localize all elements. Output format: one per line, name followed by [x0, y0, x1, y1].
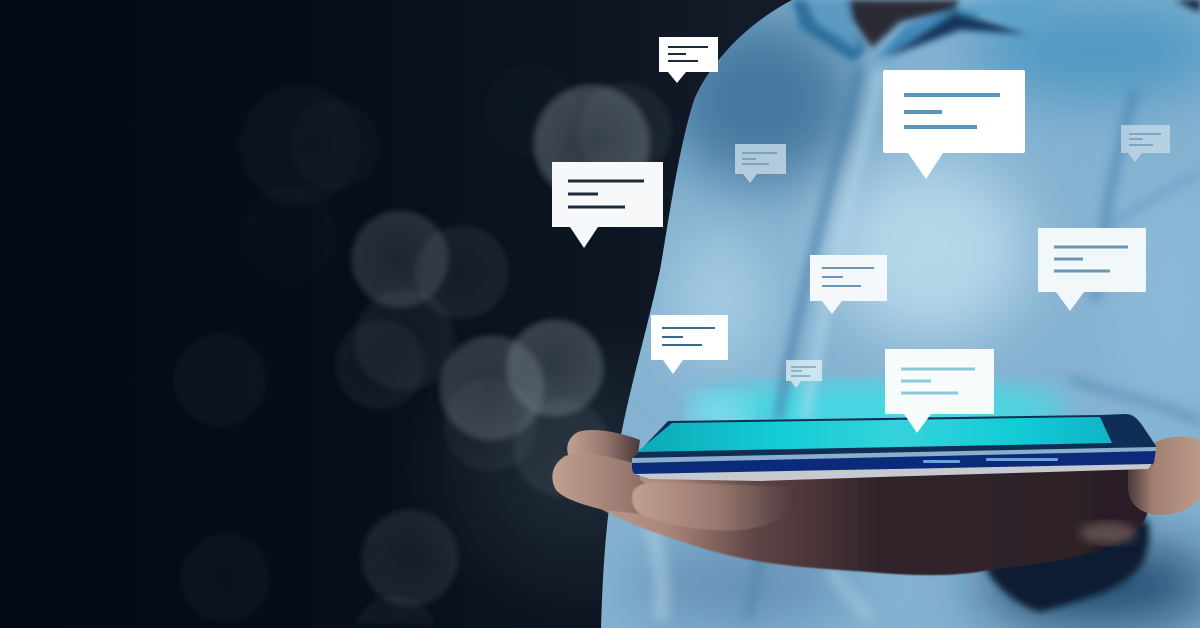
- tablet glass back plate: [633, 414, 1156, 462]
- bokeh lights: [172, 62, 673, 624]
- bubble: top small: [659, 37, 718, 83]
- bubble: above tablet: [885, 349, 994, 433]
- shirt base colour: [600, 0, 1200, 628]
- bubble: tiny center: [786, 360, 822, 388]
- shirt placket and folds: [650, 65, 1200, 620]
- tablet silver bottom line: [634, 464, 1152, 481]
- tablet screen: [637, 417, 1112, 452]
- bubble: center: [810, 255, 887, 314]
- neck and collar: [792, 0, 1200, 62]
- middle finger: [552, 454, 700, 520]
- bubble: lower left: [651, 315, 728, 374]
- hand: [552, 430, 1200, 612]
- bubble: large top right: [883, 70, 1025, 179]
- right thumb: [1128, 437, 1200, 515]
- bubble: left large: [552, 162, 663, 248]
- shirt light and shade: [630, 0, 1200, 625]
- palm: [603, 465, 1148, 575]
- tablet edge band: [632, 449, 1156, 476]
- bubble: faint top center: [735, 144, 786, 183]
- top finger: [567, 430, 640, 470]
- tablet metal line: [632, 447, 1156, 463]
- sleeve cuff: [986, 520, 1149, 612]
- bubble: right middle: [1038, 228, 1146, 311]
- lower finger: [632, 482, 798, 530]
- bubble: faint far right: [1121, 125, 1170, 162]
- side buttons: [923, 460, 960, 463]
- message bubbles: [552, 37, 1170, 433]
- cyan screen glow: [686, 376, 1076, 420]
- man in blue shirt: [600, 0, 1200, 628]
- light on wrist: [1080, 522, 1136, 544]
- tablet: [632, 414, 1156, 481]
